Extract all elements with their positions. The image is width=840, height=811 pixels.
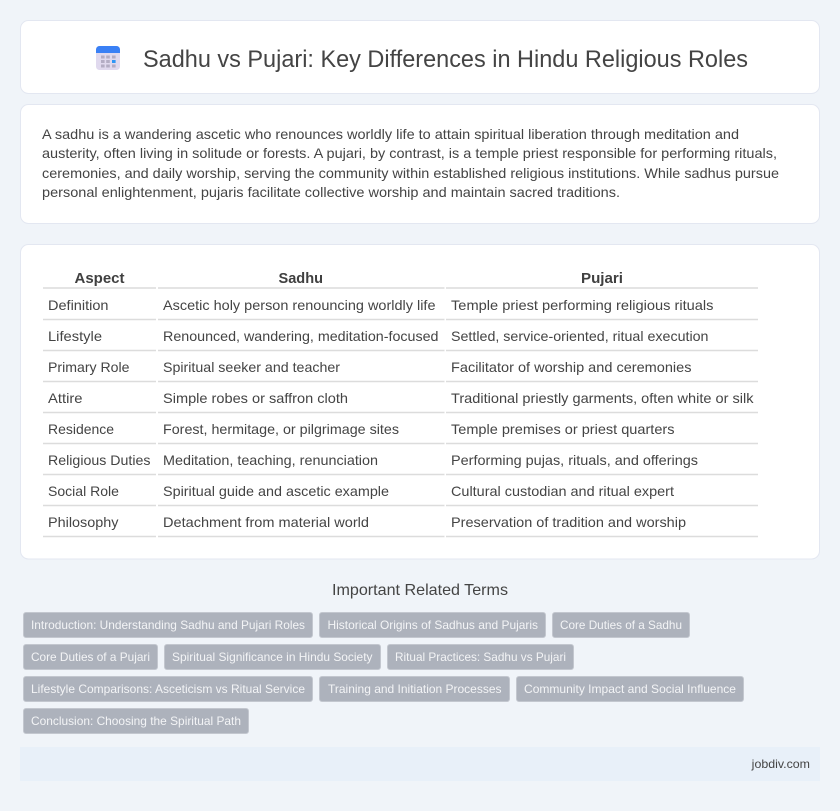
tag: Ritual Practices: Sadhu vs Pujari (395, 650, 566, 664)
table row: Definition: Temple priest performing religious rituals (451, 297, 714, 313)
table row: Primary Role: Primary Role (48, 359, 130, 375)
table row: Social Role (48, 483, 674, 499)
table row: Religious Duties: Performing pujas, rituals, and offerings (451, 452, 698, 468)
table row: Philosophy (48, 514, 686, 530)
table row: Philosophy: Philosophy (48, 514, 118, 530)
text block: introduction (42, 126, 779, 200)
icon: calendar (96, 46, 120, 70)
table row: Residence: Residence (48, 421, 114, 437)
tag: Historical Origins of Sadhus and Pujaris (328, 618, 538, 632)
tag (320, 676, 510, 702)
tag (24, 644, 158, 670)
table row: Attire: Attire (48, 390, 83, 406)
table row: Primary Role: Facilitator of worship and ceremonies (451, 359, 692, 375)
tag: Training and Initiation Processes (328, 682, 502, 696)
tag (164, 644, 380, 670)
text block: introduction: personal enlightenment, pujaris facilitate collective worship and maintain sacred traditions. (42, 184, 620, 200)
table header: Sadhu (278, 271, 323, 287)
panel: introduction (20, 104, 820, 224)
tag (516, 676, 744, 702)
footer (20, 747, 820, 781)
table row: Attire (48, 390, 755, 406)
table row: Definition: Definition (48, 297, 108, 313)
text block: introduction: ceremonies, and daily worship, serving the community within established religious institutions. While sadhus pursue (42, 165, 779, 181)
text block: introduction: A sadhu is a wandering ascetic who renounces worldly life to attain spiritual liberation through meditation and (42, 126, 739, 142)
tag: Conclusion: Choosing the Spiritual Path (31, 714, 241, 728)
table row: Definition: Ascetic holy person renouncing worldly life (163, 297, 436, 313)
tag: Core Duties of a Pujari (31, 650, 150, 664)
tag: Introduction: Understanding Sadhu and Pujari Roles (31, 618, 305, 632)
table row: Lifestyle (48, 328, 708, 344)
tag (388, 644, 574, 670)
tag (24, 708, 248, 734)
panel: header (20, 20, 820, 94)
tag: Core Duties of a Sadhu (560, 618, 682, 632)
tag (24, 612, 312, 638)
table row: Social Role: Social Role (48, 483, 119, 499)
table row: Religious Duties: Religious Duties (48, 452, 150, 468)
footer: jobdiv.com (751, 757, 810, 771)
table row: Philosophy: Detachment from material world (163, 514, 369, 530)
table row: Religious Duties (48, 452, 698, 468)
table row: Lifestyle: Renounced, wandering, meditation-focused (163, 328, 438, 344)
tag: Community Impact and Social Influence (524, 682, 736, 696)
table row: Attire: Simple robes or saffron cloth (163, 390, 348, 406)
heading: related terms: Important Related Terms (332, 582, 508, 599)
table row: Philosophy: Preservation of tradition and worship (451, 514, 686, 530)
tag (320, 612, 546, 638)
related terms tags (24, 612, 744, 734)
title: Sadhu vs Pujari: Key Differences in Hindu Religious Roles (143, 46, 748, 73)
table row: Social Role: Spiritual guide and ascetic example (163, 483, 389, 499)
table row: Residence: Forest, hermitage, or pilgrimage sites (163, 421, 399, 437)
text block: introduction: austerity, often living in solitude or forests. A pujari, by contrast, is a temple priest responsible for performing rituals, (42, 145, 777, 161)
table row: Residence (48, 421, 674, 437)
tag (24, 676, 312, 702)
table row: Definition (48, 297, 714, 313)
table row: Primary Role (48, 359, 692, 375)
table header: Aspect (74, 271, 125, 287)
table row: Lifestyle: Lifestyle (48, 328, 102, 344)
table header: Pujari (581, 271, 623, 287)
table header (74, 271, 623, 287)
table row: Religious Duties: Meditation, teaching, renunciation (163, 452, 378, 468)
table row: Attire: Traditional priestly garments, often white or silk (451, 390, 755, 406)
table row: Lifestyle: Settled, service-oriented, ritual execution (451, 328, 708, 344)
tag: Spiritual Significance in Hindu Society (172, 650, 372, 664)
table row: Residence: Temple premises or priest quarters (451, 421, 674, 437)
tag: Lifestyle Comparisons: Asceticism vs Ritual Service (31, 682, 305, 696)
panel: comparison table (20, 244, 820, 559)
tag (552, 612, 690, 638)
table row: Social Role: Cultural custodian and ritual expert (451, 483, 674, 499)
table row: Primary Role: Spiritual seeker and teacher (163, 359, 340, 375)
